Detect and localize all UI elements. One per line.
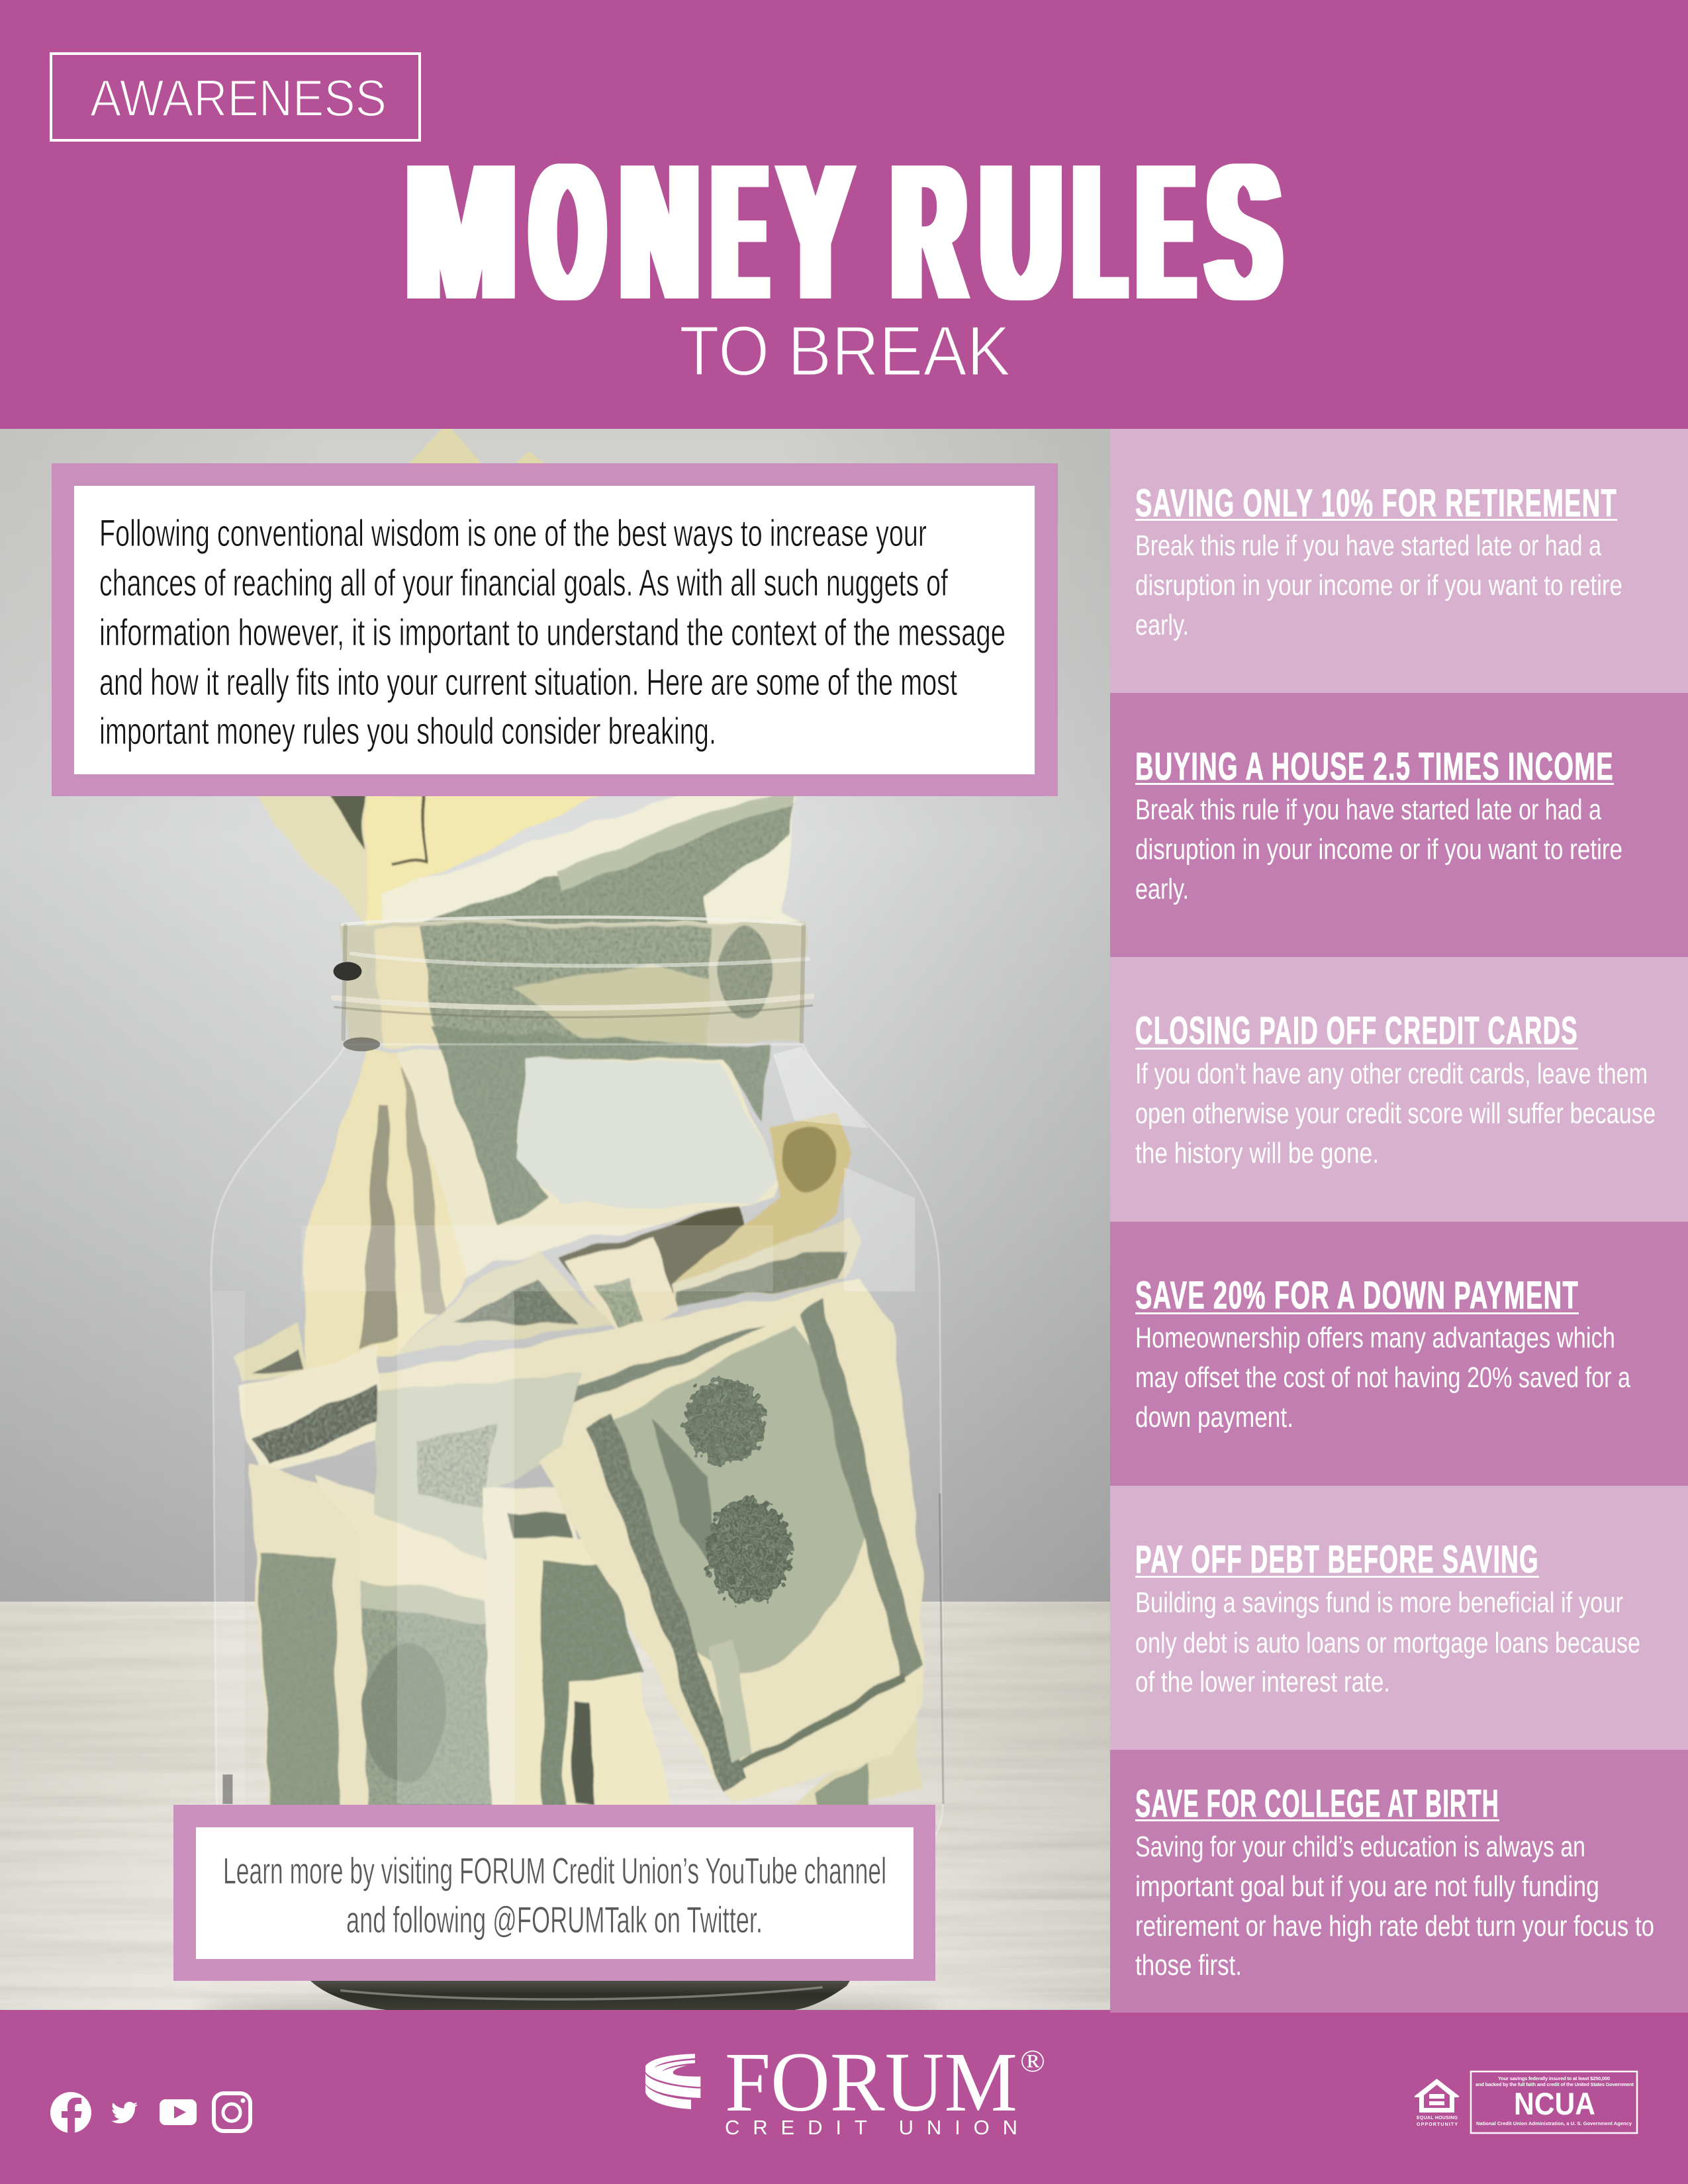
intro paragraph: Following conventional wisdom is one of the best ways to increase your: [99, 512, 927, 555]
icon: twitter: [111, 2102, 138, 2123]
title: N: [622, 124, 698, 340]
title: R: [893, 124, 964, 340]
title: O: [532, 124, 603, 340]
logo mark: [645, 2054, 700, 2109]
icon: facebook: [50, 2092, 91, 2133]
body text: down payment.: [1135, 1401, 1293, 1433]
body text: [1135, 1322, 1630, 1433]
bill tips above intro box: [408, 429, 547, 465]
panel: learn more callout: [173, 1805, 935, 1981]
intro paragraph: information however, it is important to understand the context of the message: [99, 612, 1006, 654]
body text: [1135, 1058, 1656, 1169]
equal housing logo: [1415, 2079, 1459, 2127]
icon: instagram: [214, 2093, 250, 2131]
jar and banknotes: [211, 786, 943, 2011]
body text: of the lower interest rate.: [1135, 1666, 1390, 1698]
panel: buying a house 2.5 times income: [1110, 693, 1688, 957]
footer band: [0, 2010, 1688, 2184]
body text: early.: [1135, 609, 1189, 641]
trees on the bill: [684, 1379, 791, 1604]
intro paragraph: and how it really fits into your current situation. Here are some of the most: [99, 661, 957, 704]
panel: pay off debt before saving: [1110, 1486, 1688, 1750]
bills in body: [234, 1027, 922, 1812]
body text: [1135, 1586, 1640, 1698]
neck contents: [340, 923, 805, 1050]
logo wordmark: FORUM: [725, 2035, 1017, 2129]
intro paragraph: important money rules you should consider breaking.: [99, 710, 716, 752]
icon: house: [1415, 2079, 1459, 2113]
title: Y: [780, 124, 849, 340]
panel: save 20% for a down payment: [1110, 1222, 1688, 1486]
subtitle: TO BREAK: [679, 311, 1011, 390]
title: [406, 124, 1280, 340]
photo background: wall: [0, 429, 1110, 1602]
center bill: [483, 1486, 638, 1812]
title: L: [1076, 124, 1123, 340]
category tag: awareness: AWARENESS: [90, 69, 387, 127]
social icons: [50, 2092, 250, 2133]
ncua insurance badge: NCUA: [1514, 2086, 1595, 2121]
lower left bill: [250, 1462, 376, 1812]
body text: the history will be gone.: [1135, 1137, 1379, 1169]
category tag: awareness: [51, 54, 420, 140]
jar neck threads: [334, 917, 812, 1051]
photo background: table: [0, 1602, 1110, 2029]
body text: [1135, 529, 1622, 641]
heading: [1135, 1782, 1499, 1825]
body text: those first.: [1135, 1949, 1242, 1981]
ncua insurance badge: [1471, 2071, 1637, 2133]
title: M: [406, 124, 516, 340]
icon: youtube: [160, 2099, 197, 2125]
panel: intro text box: [52, 463, 1058, 796]
body text: [1135, 794, 1622, 905]
bills above the neck: [252, 786, 805, 927]
bottom right bills: [780, 1719, 922, 1812]
callout text: [223, 1850, 886, 1940]
intro paragraph: chances of reaching all of your financial goals. As with all such nuggets of: [99, 562, 948, 604]
callout text: and following @FORUMTalk on Twitter.: [346, 1899, 763, 1940]
registered mark: ®: [1020, 2044, 1045, 2079]
title: U: [982, 124, 1060, 340]
jar base: [308, 1979, 851, 2011]
jar glass: [211, 1044, 943, 1850]
logo: forum credit union: [645, 2035, 1045, 2139]
photo: money jar on table: [0, 429, 1110, 2029]
title: E: [714, 124, 765, 340]
callout text: Learn more by visiting FORUM Credit Union’s YouTube channel: [223, 1850, 886, 1891]
big hundred dollar bill: [539, 1283, 922, 1804]
equal housing logo: EQUAL HOUSING: [1417, 2116, 1458, 2120]
panel: saving only 10% for retirement: [1110, 429, 1688, 693]
logo tagline: CREDIT UNION: [725, 2116, 1017, 2139]
body text: [1135, 1831, 1654, 1981]
title: E: [1139, 124, 1192, 340]
intro paragraph: [99, 512, 1006, 752]
body text: early.: [1135, 873, 1189, 905]
title: S: [1208, 124, 1280, 340]
equal housing logo: OPPORTUNITY: [1417, 2122, 1458, 2127]
panel: save for college at birth: [1110, 1750, 1688, 2013]
ncua insurance badge: Your savings federally insured to at least $250,000: [1498, 2075, 1610, 2081]
eagle bill: [316, 1486, 489, 1812]
panel: closing paid off credit cards: [1110, 957, 1688, 1222]
ncua insurance badge: and backed by the full faith and credit of the United States Government: [1476, 2081, 1634, 2087]
ncua insurance badge: National Credit Union Administration, a U. S. Government Agency: [1476, 2120, 1632, 2126]
header band: [0, 0, 1688, 429]
